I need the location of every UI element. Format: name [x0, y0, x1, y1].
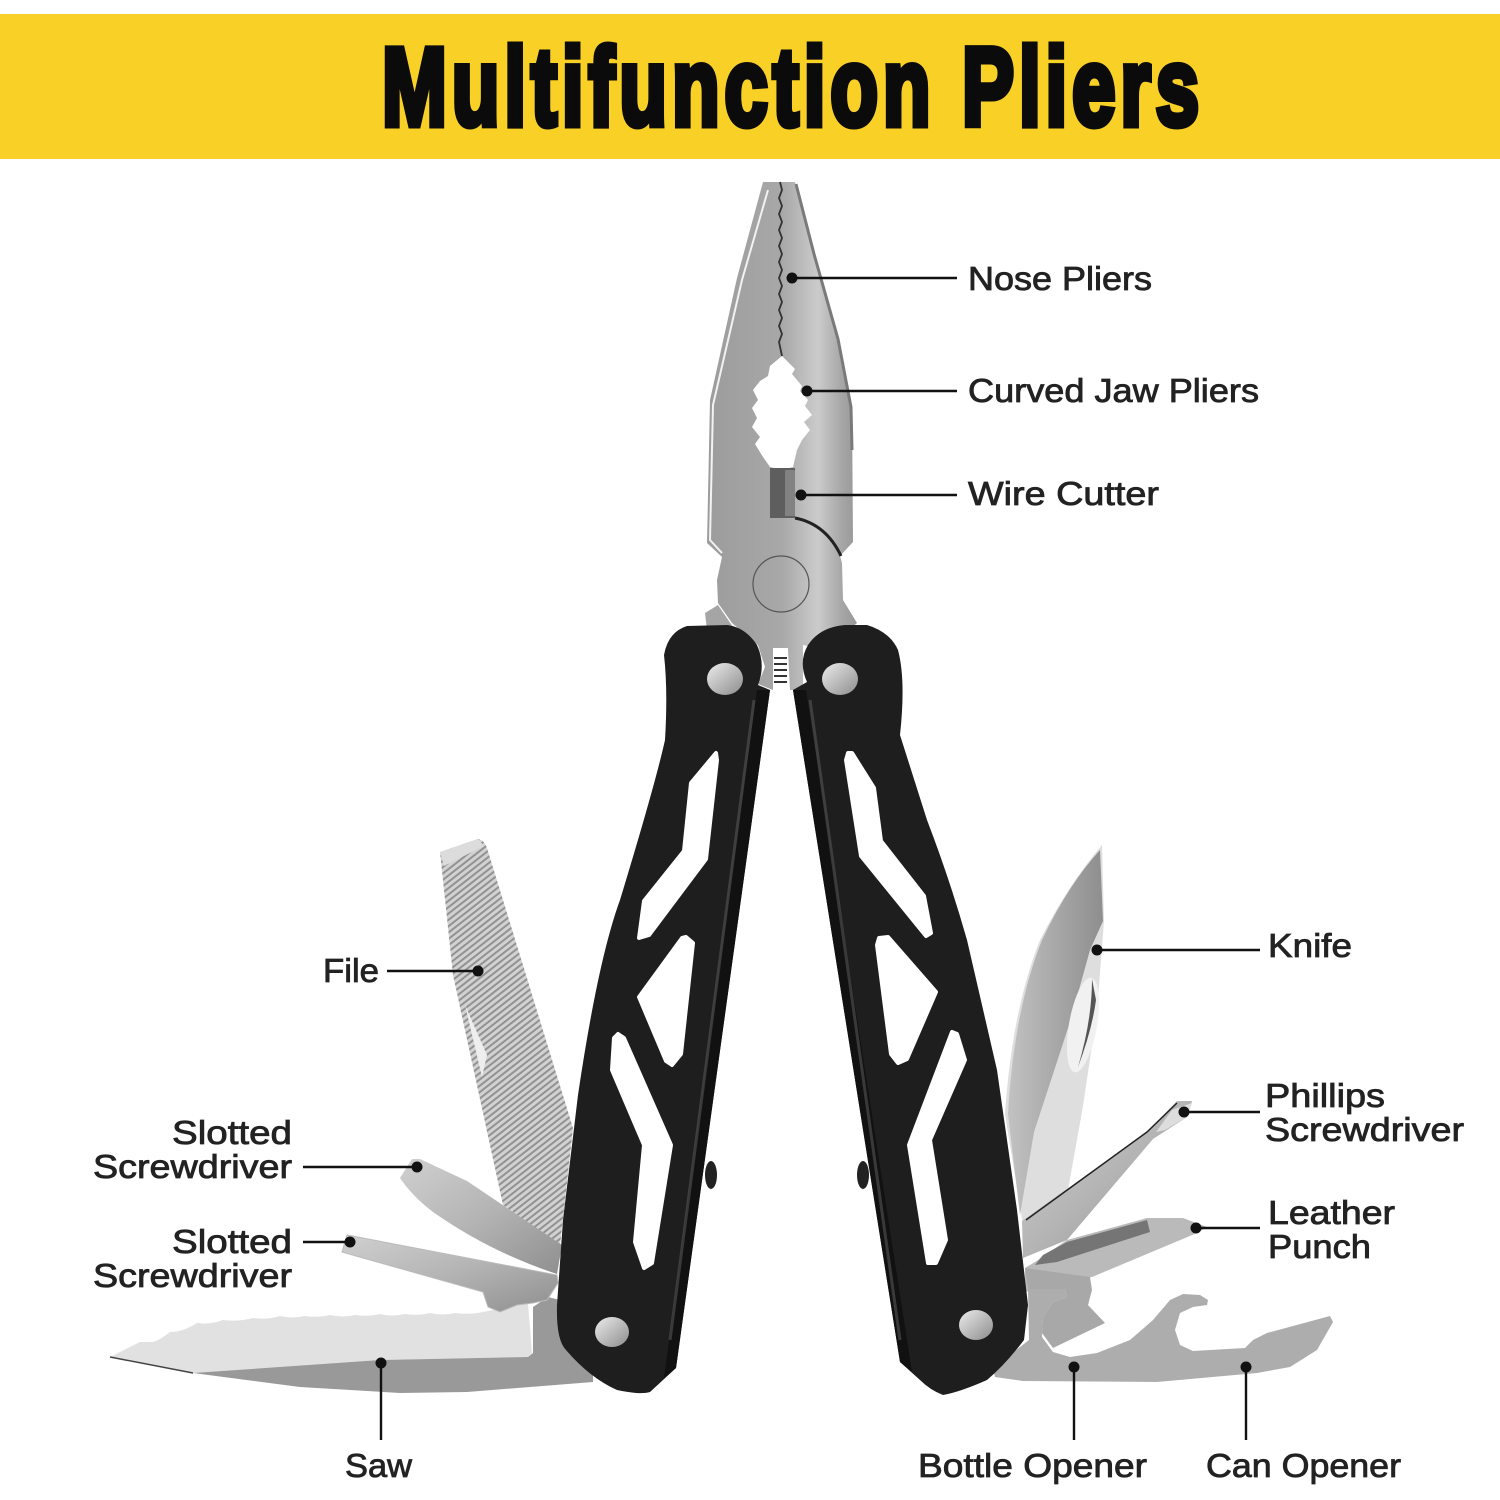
rivet top	[707, 663, 743, 695]
callout: File	[323, 952, 484, 989]
callout: Phillips Screwdriver: Screwdriver	[1265, 1111, 1464, 1148]
callout: Slotted Screwdriver lower	[93, 1223, 356, 1294]
title banner	[0, 14, 1500, 159]
handle inner dark strip	[664, 690, 770, 1378]
upper cutout	[639, 753, 717, 938]
right jaw edge shadow	[796, 184, 852, 450]
callout: Phillips Screwdriver: Phillips	[1265, 1077, 1385, 1114]
handle edge highlight	[670, 700, 754, 1340]
left handle	[557, 625, 770, 1393]
lower cutout	[909, 1032, 965, 1263]
lower cutout	[612, 1034, 671, 1268]
knife thumb hole	[1061, 975, 1105, 1075]
middle cutout	[877, 937, 936, 1063]
callout: Nose Pliers: Nose Pliers	[968, 260, 1152, 297]
rivet bottom	[595, 1317, 629, 1347]
callout: Bottle Opener	[918, 1362, 1147, 1484]
pivot arc	[795, 518, 841, 556]
middle cutout	[639, 937, 693, 1065]
handle edge highlight	[810, 700, 900, 1340]
callout: Leather Punch: Leather	[1268, 1194, 1395, 1231]
callout: Leather Punch	[1190, 1194, 1395, 1265]
rivet bottom	[959, 1310, 993, 1340]
callout: Slotted Screwdriver lower: Slotted	[172, 1223, 292, 1260]
callout: Nose Pliers	[786, 260, 1152, 297]
tool: leather punch	[1025, 1218, 1207, 1292]
callout: Slotted Screwdriver upper: Slotted	[172, 1114, 292, 1151]
jaw opening	[752, 356, 812, 470]
callout: Wire Cutter	[796, 475, 1159, 512]
tool: bottle opener inner piece	[1025, 1268, 1105, 1348]
callout: Leather Punch: Punch	[1268, 1228, 1371, 1265]
callout: Curved Jaw Pliers: Curved Jaw Pliers	[968, 372, 1259, 409]
callout: Can Opener: Can Opener	[1206, 1447, 1401, 1484]
callout: Wire Cutter: Wire Cutter	[968, 475, 1159, 512]
tool: slotted screwdriver upper	[400, 1159, 562, 1274]
callout: Knife: Knife	[1268, 927, 1352, 964]
pivot circle	[753, 556, 809, 612]
callout: Bottle Opener: Bottle Opener	[918, 1447, 1147, 1484]
pliers head	[705, 182, 857, 690]
wire cutter slot	[770, 468, 795, 518]
right handle	[793, 625, 1028, 1395]
tool: slotted screwdriver lower	[342, 1235, 558, 1312]
jaw serration	[779, 182, 782, 356]
tool: bottle and can opener body	[993, 1289, 1333, 1382]
knife blade shading	[1008, 850, 1103, 1215]
callout: Slotted Screwdriver lower: Screwdriver	[93, 1257, 292, 1294]
callout: Slotted Screwdriver upper: Screwdriver	[93, 1148, 292, 1185]
side knob	[705, 1161, 717, 1189]
saw cutting edge	[110, 1357, 193, 1373]
upper cutout	[846, 753, 931, 936]
callout: File: File	[323, 952, 379, 989]
tool: phillips screwdriver	[1022, 1101, 1192, 1258]
rivet top	[822, 663, 858, 695]
callout: Phillips Screwdriver	[1178, 1077, 1464, 1148]
left jaw edge highlight	[710, 190, 768, 553]
handle inner dark strip	[793, 690, 912, 1372]
tool: saw	[110, 1297, 593, 1393]
callout: Slotted Screwdriver upper	[93, 1114, 422, 1185]
callout: Curved Jaw Pliers	[802, 372, 1259, 409]
side knob	[857, 1161, 869, 1189]
callout: Saw	[345, 1358, 412, 1484]
callout: Can Opener	[1206, 1362, 1401, 1484]
saw lower shaded half	[193, 1297, 593, 1393]
callout: Knife	[1092, 927, 1352, 964]
tool: knife	[1005, 845, 1105, 1225]
spring	[773, 648, 788, 690]
tool: file	[440, 839, 573, 1245]
callout: Saw: Saw	[345, 1447, 412, 1484]
small rear plate	[705, 605, 735, 630]
